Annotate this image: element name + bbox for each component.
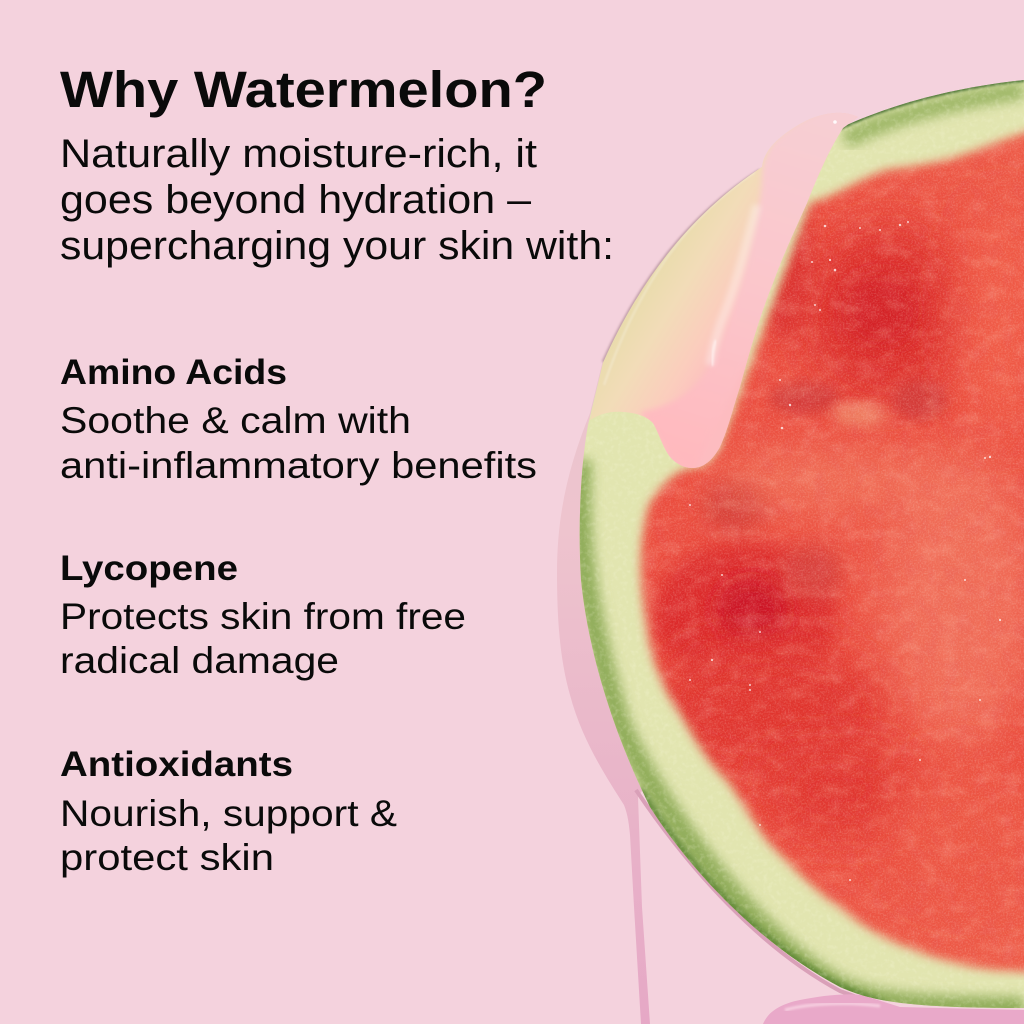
light patches (832, 402, 888, 428)
flesh texture (675, 245, 920, 806)
benefit: antioxidants (60, 745, 397, 878)
benefit: lycopene: Lycopene (60, 549, 238, 588)
dark core blotches (803, 227, 967, 403)
benefit: lycopene: radical damage (60, 640, 339, 681)
title: Why Watermelon? (60, 61, 547, 118)
benefit: amino acids: Soothe & calm with (60, 400, 411, 441)
intro paragraph: supercharging your skin with: (60, 224, 614, 268)
intro paragraph: goes beyond hydration – (60, 178, 532, 222)
benefit: lycopene (60, 549, 466, 681)
melon rind (550, 70, 1024, 1020)
gel highlight streaks (710, 205, 757, 365)
gel puddle at the bottom (763, 994, 1024, 1024)
flesh sparkles (689, 221, 1001, 881)
benefit: lycopene: Protects skin from free (60, 596, 466, 637)
benefit: amino acids: anti-inflammatory benefits (60, 445, 537, 486)
benefit: amino acids: Amino Acids (60, 353, 287, 392)
mauve rim of upper edge (603, 170, 760, 362)
intro paragraph (60, 132, 614, 268)
gel gloss dot (833, 120, 837, 124)
gel behind melon with drip (557, 167, 762, 1024)
benefit: amino acids (60, 353, 537, 486)
intro paragraph: Naturally moisture-rich, it (60, 132, 537, 176)
benefit: antioxidants: Nourish, support & (60, 793, 397, 834)
benefit: antioxidants: Antioxidants (60, 745, 293, 784)
melon flesh (630, 120, 1024, 980)
illustration: watermelon slice with dripping gel (550, 70, 1024, 1024)
upper rind panel under gel (590, 112, 858, 468)
gel rim along the lower rind (636, 790, 890, 1009)
gel tongue (640, 105, 860, 480)
benefit: antioxidants: protect skin (60, 837, 274, 878)
